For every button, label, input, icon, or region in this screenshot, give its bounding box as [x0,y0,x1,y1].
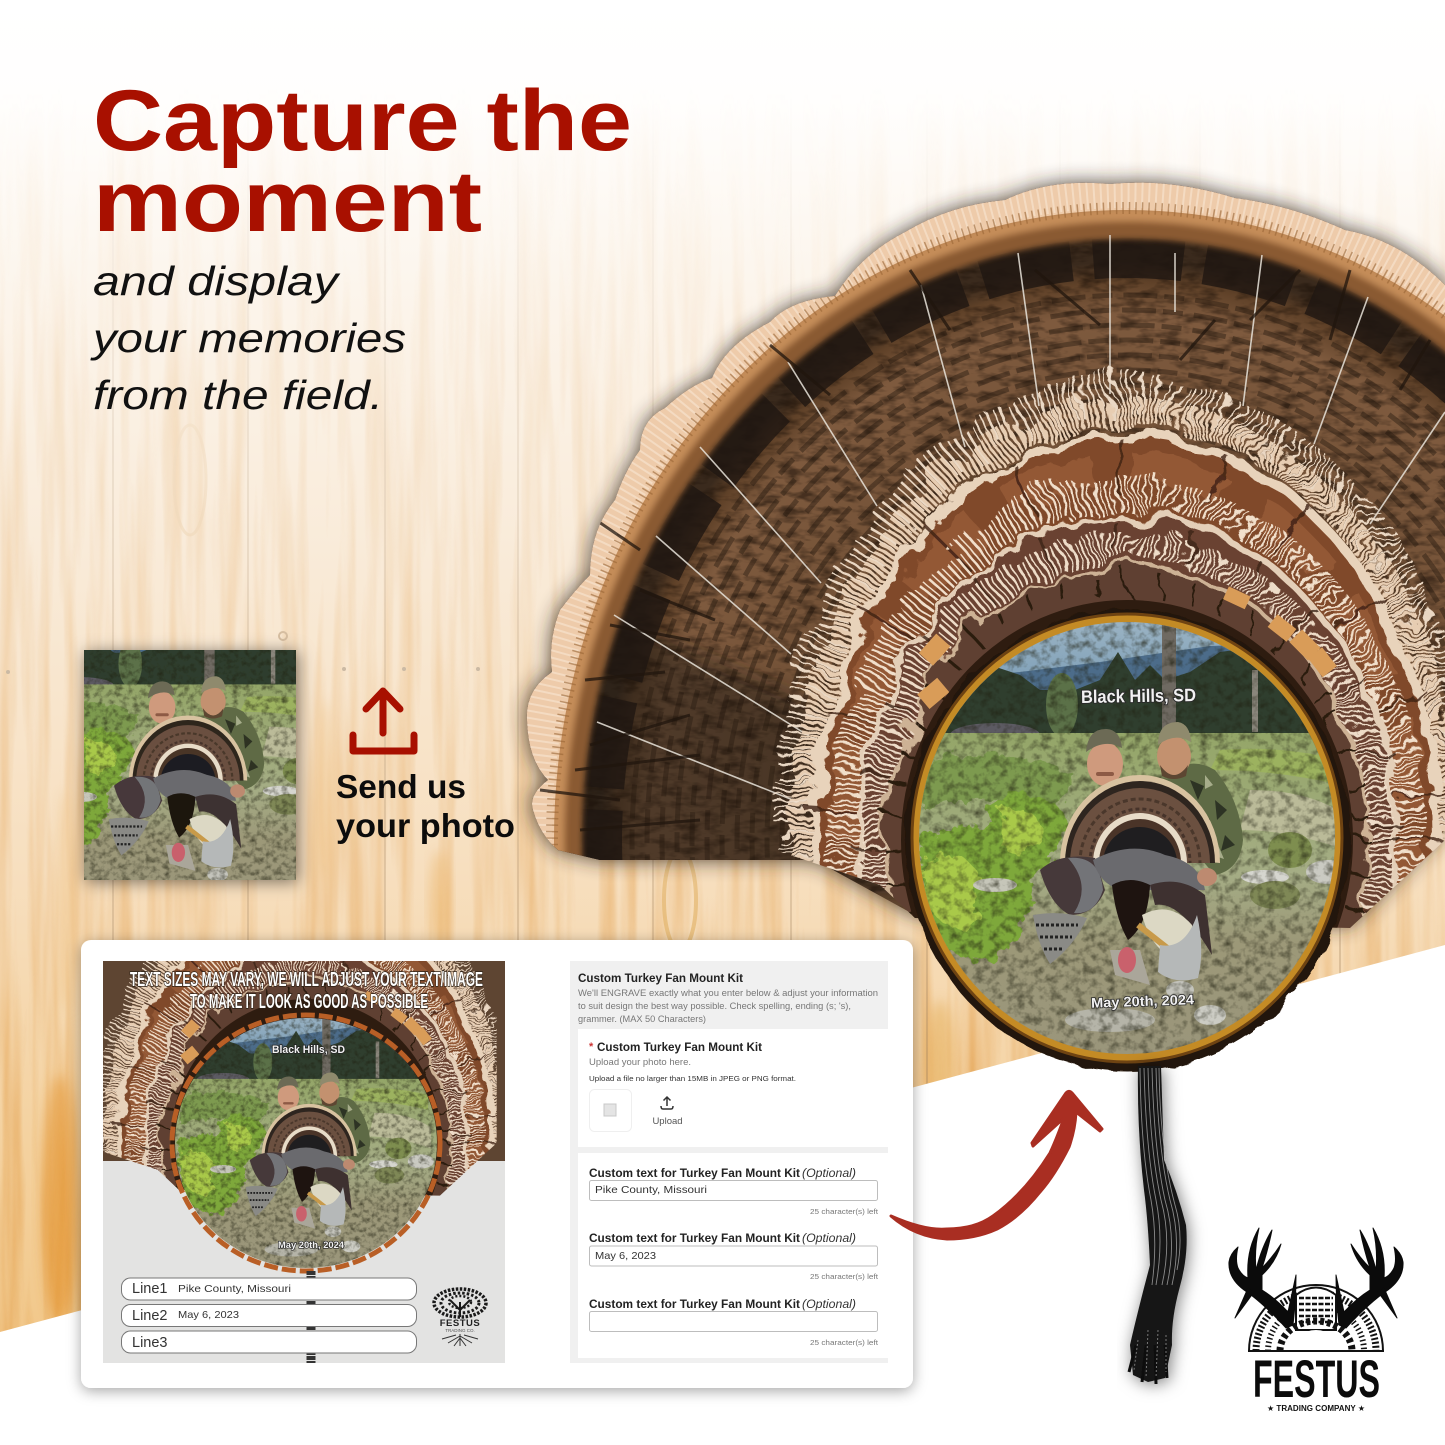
engraved text: location: Black Hills, SD [1081,685,1196,707]
input: line 2: Line2 [132,1308,167,1324]
feather tip bands [526,182,1445,856]
logo: festus tree [434,1289,486,1346]
field 3: (Optional) [802,1299,856,1311]
field 2: Custom text for Turkey Fan Mount Kit [589,1233,800,1245]
field 2: May 6, 2023 [595,1250,656,1262]
input: line 1: Line1 [132,1281,167,1297]
logo turkey fan [1248,1285,1384,1351]
logo: festus trading company [1229,1228,1403,1413]
upload section: Upload [652,1116,683,1127]
field 3: Custom text for Turkey Fan Mount Kit [589,1299,800,1311]
input: line 2 [122,1304,416,1326]
send us your photo caption: your photo [336,807,515,844]
input: line 1 [122,1278,416,1300]
subtitle: and display [93,258,341,304]
title [93,73,632,250]
field 3 [589,1299,879,1347]
input: line 1: Pike County, Missouri [178,1283,291,1295]
field 3: 25 character(s) left [810,1338,879,1347]
field 1: Pike County, Missouri [595,1184,707,1196]
field 2: (Optional) [802,1233,856,1245]
notice text [130,970,483,1009]
field 2: 25 character(s) left [810,1272,879,1281]
upload section [578,1029,888,1147]
turkey beard [1129,1066,1187,1384]
wood slice rim [905,609,1349,1071]
covert feathers [792,395,1445,1285]
form panel [570,961,888,1363]
custom text section [578,1153,888,1358]
field 2 [589,1233,879,1281]
title: moment [93,154,482,250]
input: line 3: Line3 [132,1335,167,1351]
customer photo [74,640,310,894]
form intro: Custom Turkey Fan Mount Kit [578,973,743,985]
logo right antler [1336,1228,1403,1328]
field 1: 25 character(s) left [810,1207,879,1216]
field 1: (Optional) [802,1168,856,1180]
white lower wedge [0,945,1445,1445]
field 1 [589,1168,879,1216]
upload section: Upload your photo here. [589,1057,691,1068]
round photo print [919,622,1335,1054]
turkey fan mount [510,166,1445,1072]
form intro [578,973,878,1025]
order form card [72,934,922,1400]
input: line 2: May 6, 2023 [178,1309,239,1321]
logo: festus tree: TRADING CO. [445,1328,475,1333]
send us your photo caption: Send us [336,768,466,805]
form intro: We'll ENGRAVE exactly what you enter below & adjust your information [578,988,878,999]
preview image panel [103,961,505,1363]
arrow: form to mount [891,1092,1102,1239]
icon: form upload [661,1097,673,1109]
upload section: * [589,1041,594,1053]
form intro: grammer. (MAX 50 Characters) [578,1014,706,1025]
logo left antler [1229,1228,1296,1328]
upload section: Upload a file no larger than 15MB in JPEG or PNG format. [589,1074,796,1083]
image placeholder [590,1090,632,1132]
engraved text: date: May 20th, 2024 [1091,991,1194,1011]
subtitle: your memories [90,315,406,361]
upload section: Custom Turkey Fan Mount Kit [597,1042,762,1054]
logo: festus tree: FESTUS [440,1318,480,1329]
subtitle [90,258,406,418]
title: Capture the [93,73,632,169]
logo tagline: ★ TRADING COMPANY ★ [1267,1404,1365,1413]
preview date text: May 20th, 2024 [278,1240,344,1250]
notice text: TEXT SIZES MAY VARY, WE WILL ADJUST YOUR TEXT/IMAGE [130,969,483,991]
send us your photo caption [336,768,515,844]
notice text: TO MAKE IT LOOK AS GOOD AS POSSIBLE [190,991,428,1013]
form intro: to suit design the best way possible. Check spelling, ending (s; 's), [578,1001,851,1012]
subtitle: from the field. [93,372,383,418]
beard strips behind lines [306,1271,316,1365]
preview location text: Black Hills, SD [272,1044,345,1056]
input: line 3 [122,1331,416,1353]
outer tail feathers [526,182,1445,911]
field 1: Custom text for Turkey Fan Mount Kit [589,1168,800,1180]
icon: upload [353,691,414,751]
